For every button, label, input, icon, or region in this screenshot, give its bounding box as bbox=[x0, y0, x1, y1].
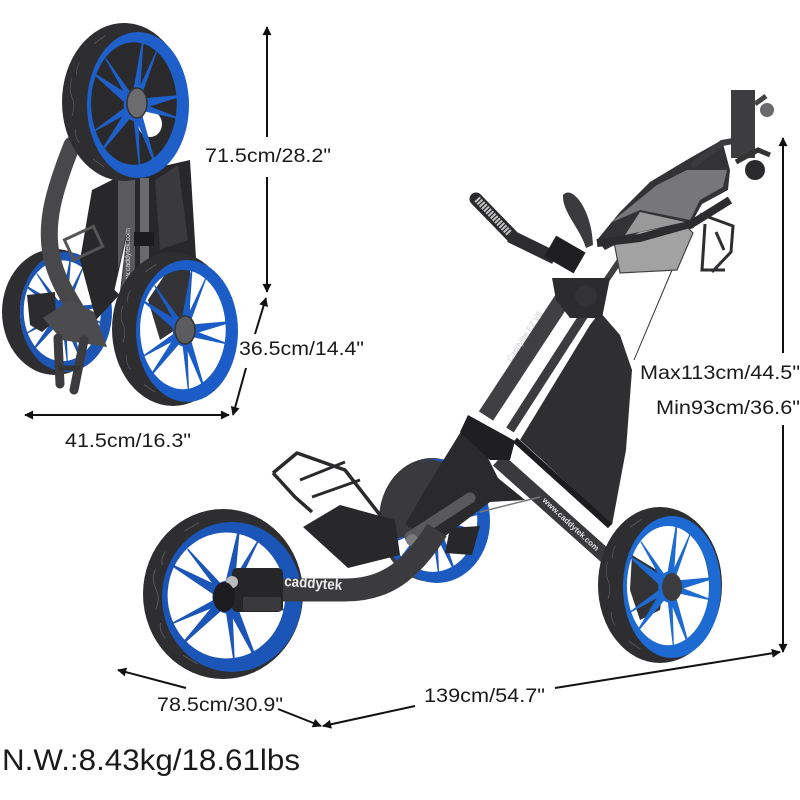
dimension: folded width: 41.5cm/16.3" bbox=[65, 431, 191, 452]
front folded wheel bbox=[112, 252, 238, 406]
handle grip bbox=[476, 199, 586, 273]
dimension: folded depth: 36.5cm/14.4" bbox=[239, 339, 364, 360]
front wheel bbox=[143, 509, 303, 679]
rear folded wheel bbox=[2, 249, 112, 375]
folded frame: www.caddytek.com bbox=[125, 228, 132, 289]
right wheel bbox=[598, 507, 722, 663]
bottle holder bbox=[700, 214, 733, 272]
url text: www.caddytek.com bbox=[540, 495, 601, 553]
dimension: open height bbox=[640, 138, 800, 652]
umbrella holder bbox=[692, 90, 774, 180]
folded cart bbox=[2, 23, 238, 406]
bag bbox=[520, 312, 632, 525]
dimension: folded depth bbox=[233, 298, 364, 415]
folded bracket bbox=[43, 300, 107, 390]
tray bbox=[597, 140, 730, 250]
front arm with logo: caddytek bbox=[284, 573, 343, 594]
open cart bbox=[143, 90, 774, 679]
dimension: open height: Min93cm/36.6" bbox=[656, 398, 800, 419]
dimension: open length: 139cm/54.7" bbox=[424, 686, 545, 707]
dimension: folded height: 71.5cm/28.2" bbox=[205, 146, 331, 167]
dimension: open height: Max113cm/44.5" bbox=[640, 363, 800, 384]
dimension: open width bbox=[118, 670, 321, 726]
folded frame bbox=[49, 145, 196, 320]
lower frame block bbox=[405, 278, 610, 540]
dimension: open width: 78.5cm/30.9" bbox=[157, 695, 283, 716]
rear wheel bbox=[379, 458, 490, 583]
lower bracket bbox=[406, 498, 480, 555]
net weight: N.W.:8.43kg/18.61lbs bbox=[2, 744, 300, 777]
top folded wheel bbox=[62, 23, 189, 181]
open cart: Caddylite EZ V8 bbox=[505, 309, 544, 363]
scorecard holder bbox=[273, 453, 400, 568]
mesh basket bbox=[613, 217, 693, 273]
front arm with logo bbox=[213, 530, 437, 612]
brake lever bbox=[563, 192, 593, 248]
dimension: open length bbox=[323, 652, 780, 726]
frame tubes bbox=[480, 225, 693, 560]
